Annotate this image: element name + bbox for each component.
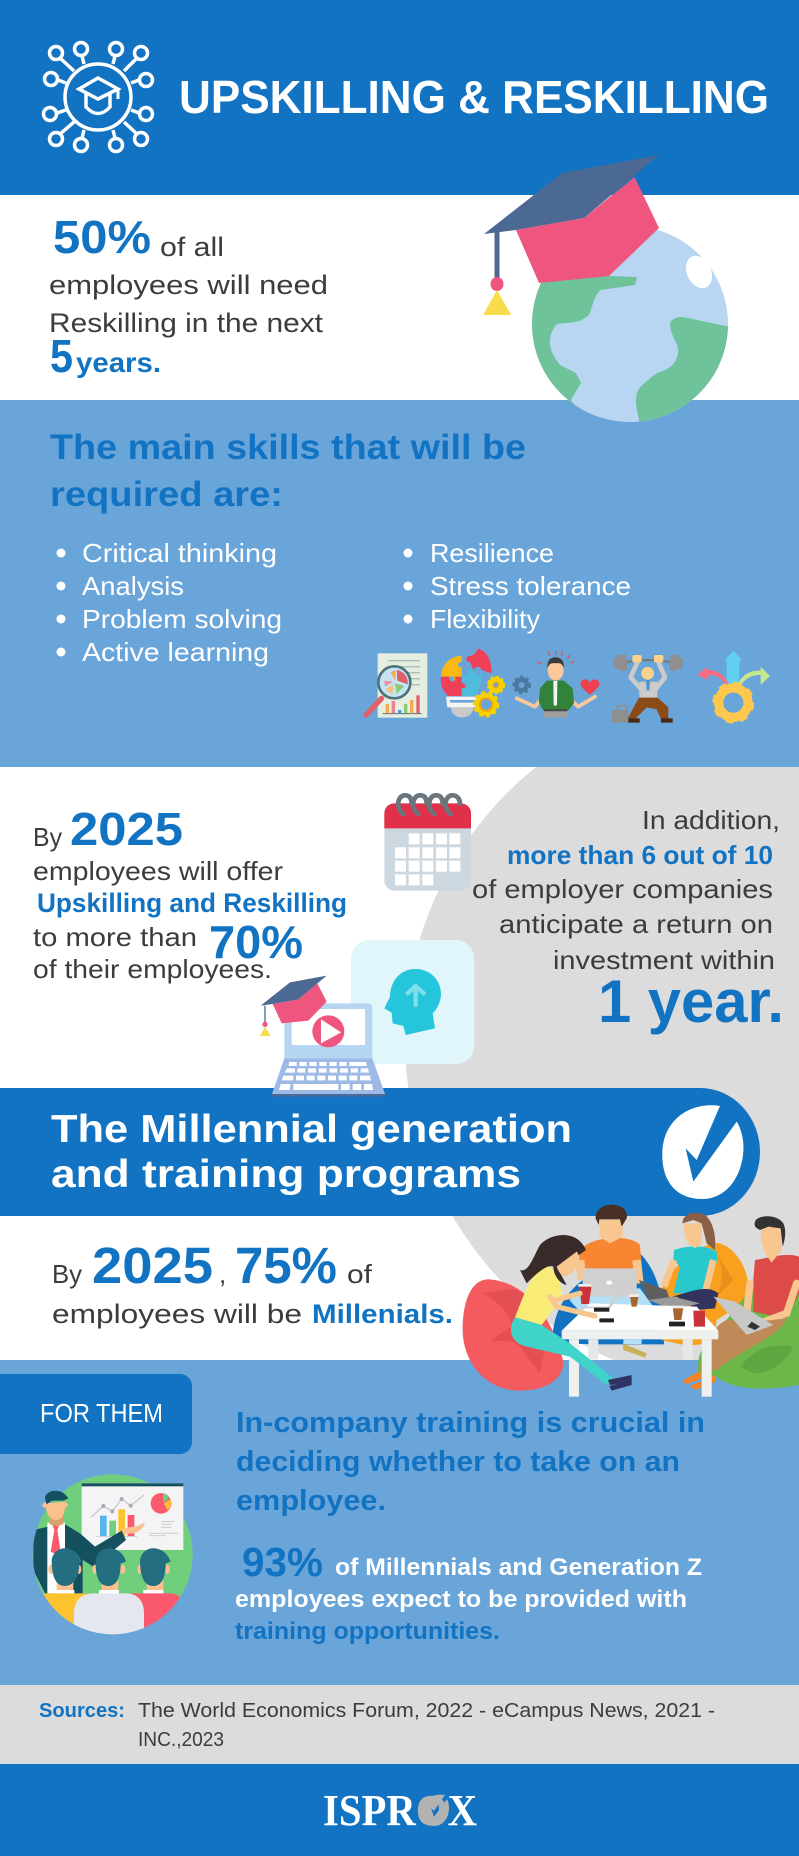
text block: return on investment <box>472 805 784 1035</box>
table <box>562 1282 718 1397</box>
text block: by 2025 upskilling: 2025 <box>70 803 183 855</box>
stat text: 50 percent: employees will need <box>49 270 328 300</box>
text block: 93 percent: of Millennials and Generation Z <box>335 1554 702 1581</box>
icon: check badge <box>662 1105 743 1199</box>
heading: millennial generation <box>51 1108 572 1196</box>
text block: by 2025 upskilling: of their employees. <box>33 954 272 984</box>
panel: sources: Sources: <box>39 1700 125 1722</box>
text block: by 2025 upskilling: 70% <box>209 916 303 968</box>
text block: 2025 75 percent millennials: , <box>219 1259 226 1289</box>
panel: 50 percent reskilling <box>50 155 728 422</box>
illustration: laptop with graduation cap <box>260 976 385 1097</box>
icons: skills row <box>366 649 770 723</box>
text block: 2025 75 percent millennials: 75% <box>235 1237 337 1294</box>
text block: 2025 75 percent millennials: 2025 <box>92 1237 213 1294</box>
text block: 2025 75 percent millennials: of <box>347 1259 373 1289</box>
icon: resilience weightlifter <box>612 654 683 723</box>
list: skills right column <box>404 538 631 634</box>
panel: sources: INC.,2023 <box>138 1729 224 1751</box>
panel: header <box>0 0 799 195</box>
illustrations: calendar, head, laptop <box>351 795 474 1064</box>
stat text: 50 percent: of all <box>160 232 224 262</box>
text block: 2025 75 percent millennials: By <box>52 1259 82 1289</box>
illustration: team around table <box>463 1205 799 1397</box>
panel: sources: The World Economics Forum, 2022 - eCampus News, 2021 - <box>138 1700 715 1722</box>
illustration: presenter <box>33 1474 193 1637</box>
panel: millennial banner <box>0 1088 760 1216</box>
person: red shirt <box>682 1216 799 1390</box>
label: for them <box>0 1374 192 1454</box>
person: orange shirt <box>578 1205 647 1358</box>
heading: main skills <box>50 428 526 514</box>
text block: in-company training <box>236 1407 705 1517</box>
text block: 93 percent: employees expect to be provided with <box>235 1586 687 1613</box>
text block: by 2025 upskilling <box>33 803 347 984</box>
text block: return on investment: investment within <box>553 945 775 975</box>
text block: in-company training: deciding whether to take on an <box>236 1446 680 1478</box>
list: skills left column: Analysis <box>82 571 184 601</box>
text block: by 2025 upskilling: employees will offer <box>33 856 283 886</box>
panel: background curve <box>406 767 799 1360</box>
icon: stress balance <box>514 651 599 718</box>
logo: ISPROX: ISPROX <box>323 1786 477 1835</box>
list: skills left column: Problem solving <box>82 604 282 634</box>
text block: in-company training: employee. <box>236 1485 386 1517</box>
stat text: 50 percent: years. <box>76 347 161 378</box>
icon: flexibility arrows <box>697 651 770 721</box>
text block: 93 percent: 93% <box>242 1539 323 1585</box>
list: skills left column <box>56 538 282 667</box>
stat text: 50 percent: 5 <box>50 330 73 382</box>
heading: main skills: required are: <box>50 475 283 514</box>
text block: return on investment: more than 6 out of 10 <box>507 840 773 870</box>
text block: return on investment: anticipate a return on <box>499 909 773 939</box>
icon: puzzle bulb <box>441 649 504 717</box>
list: skills right column: Resilience <box>430 538 554 568</box>
panel: main skills <box>0 400 799 767</box>
illustration: globe with graduation cap <box>483 155 728 422</box>
stat text: 50 percent: Reskilling in the next <box>49 308 324 338</box>
label: for them: FOR THEM <box>40 1398 163 1428</box>
heading: millennial generation: and training programs <box>51 1153 521 1196</box>
icon: calendar <box>384 795 471 891</box>
icon: growth mindset head <box>351 940 474 1064</box>
text block: 2025 75 percent millennials: employees will be <box>52 1299 302 1329</box>
icon: analysis <box>366 653 427 718</box>
stat text: 50 percent: 50% <box>53 211 151 263</box>
icon: graduation network <box>44 42 152 152</box>
list: skills right column: Stress tolerance <box>430 571 631 601</box>
beanbags <box>463 1243 799 1391</box>
list: skills left column: Active learning <box>82 637 269 667</box>
panel: footer <box>0 1764 799 1856</box>
text block: by 2025 upskilling: to more than <box>33 922 197 952</box>
panel: sources <box>0 1685 799 1764</box>
person: yellow top <box>511 1235 632 1391</box>
heading: main skills: The main skills that will be <box>50 428 526 467</box>
text block: 93 percent <box>235 1539 702 1645</box>
heading: millennial generation: The Millennial generation <box>51 1108 572 1151</box>
list: skills right column: Flexibility <box>430 604 540 634</box>
text block: by 2025 upskilling: By <box>33 822 62 852</box>
panel: for them <box>0 1360 799 1686</box>
text block: return on investment: of employer companies <box>472 874 773 904</box>
person: teal top <box>639 1213 718 1310</box>
text block: 93 percent: training opportunities. <box>235 1618 500 1645</box>
text block: by 2025 upskilling: Upskilling and Reskilling <box>37 888 347 918</box>
stat text: 50 percent <box>49 211 328 382</box>
text block: return on investment: In addition, <box>642 805 780 835</box>
text block: return on investment: 1 year. <box>598 968 784 1035</box>
text block: in-company training: In-company training is crucial in <box>236 1407 705 1439</box>
list: skills left column: Critical thinking <box>82 538 277 568</box>
title: UPSKILLING & RESKILLING <box>179 71 769 123</box>
text block: 2025 75 percent millennials: Millenials. <box>312 1299 453 1329</box>
text block: 2025 75 percent millennials <box>52 1237 453 1329</box>
